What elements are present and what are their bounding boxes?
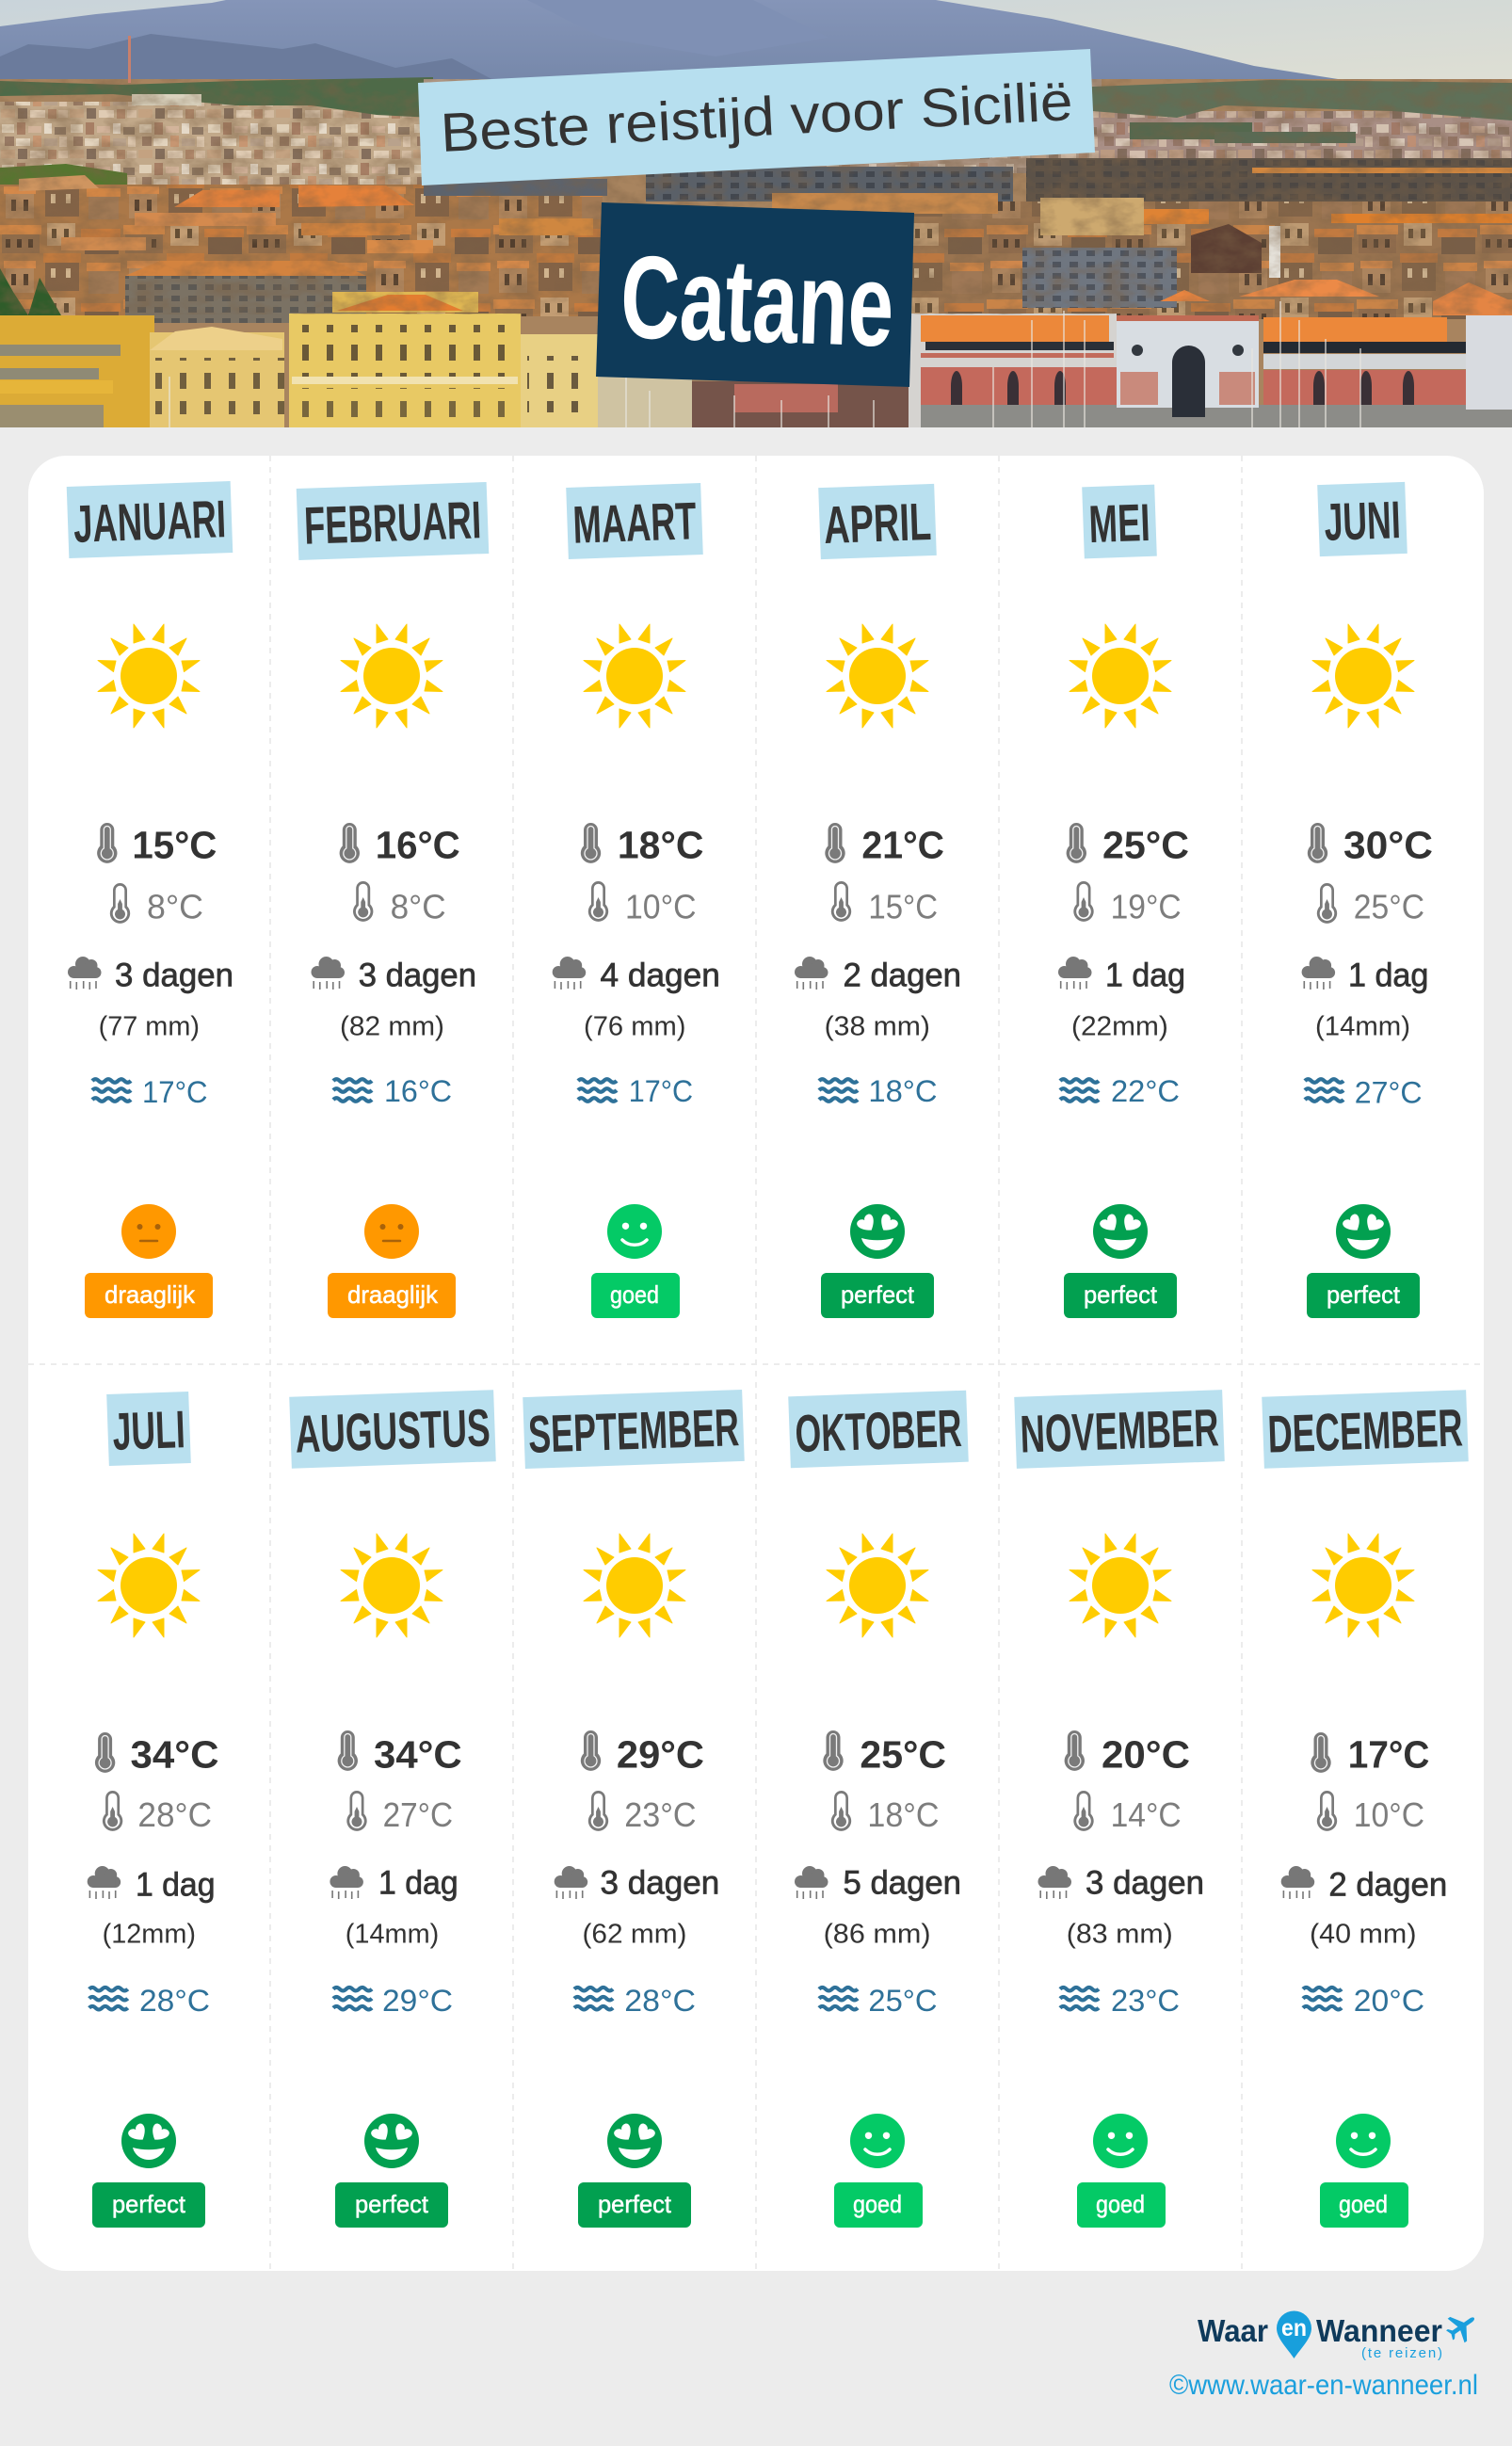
- icon: sun: [1070, 1534, 1171, 1637]
- icon: sun: [827, 624, 928, 728]
- maximum temperature: 15°C: [132, 824, 217, 867]
- rating: goed: [591, 1204, 680, 1318]
- maximum temperature: [1308, 823, 1433, 867]
- icon: sun: [98, 1534, 200, 1637]
- maximum temperature: 34°C: [130, 1733, 218, 1777]
- minimum temperature: 19°C: [1111, 888, 1182, 926]
- logo: Waar en Wanneer: en: [1281, 2315, 1307, 2341]
- sea temperature: [1060, 1984, 1180, 2018]
- sea temperature: 16°C: [384, 1074, 452, 1108]
- panel: december: [1262, 1390, 1469, 2228]
- rain days: [88, 1866, 215, 1904]
- rating: goed: goed: [1339, 2190, 1388, 2218]
- month label: juli: JULI: [111, 1399, 186, 1461]
- rainfall: (14mm): [1315, 1011, 1410, 1041]
- rainfall: (83 mm): [1067, 1919, 1173, 1949]
- minimum temperature: 10°C: [625, 888, 697, 926]
- rating: draaglijk: [328, 1204, 456, 1318]
- minimum temperature: [346, 1791, 453, 1834]
- sea temperature: [89, 1984, 210, 2018]
- minimum temperature: 8°C: [147, 888, 203, 926]
- minimum temperature: 23°C: [624, 1795, 697, 1834]
- panel: oktober: [788, 1391, 969, 2228]
- panel: januari: [67, 481, 233, 1318]
- minimum temperature: 8°C: [391, 888, 446, 926]
- sea temperature: [819, 1074, 938, 1108]
- rating: perfect: perfect: [112, 2190, 186, 2218]
- month label: maart: [566, 483, 703, 559]
- month label: mei: MEI: [1087, 492, 1151, 554]
- subtitle banner: Beste reistijd voor Sicilië: [439, 71, 1074, 164]
- rainfall: (14mm): [346, 1919, 439, 1949]
- month label: juni: [1317, 482, 1407, 556]
- rating: perfect: perfect: [1327, 1280, 1401, 1309]
- rating: perfect: perfect: [598, 2190, 672, 2218]
- sea temperature: [333, 1984, 453, 2018]
- rain days: [1281, 1866, 1447, 1904]
- month label: juni: JUNI: [1323, 490, 1402, 552]
- rain days: 1 dag: [1105, 957, 1185, 994]
- month label: november: NOVEMBER: [1020, 1397, 1220, 1464]
- rating: goed: goed: [1096, 2190, 1145, 2218]
- rating: perfect: [1064, 1204, 1177, 1318]
- minimum temperature: [1317, 1791, 1424, 1834]
- maximum temperature: [340, 823, 460, 867]
- minimum temperature: 14°C: [1111, 1795, 1182, 1834]
- rain days: [1058, 957, 1185, 994]
- panel: juni: [1302, 482, 1433, 1318]
- minimum temperature: [110, 883, 203, 926]
- sea temperature: 23°C: [1111, 1984, 1180, 2018]
- rainfall: (86 mm): [824, 1919, 931, 1949]
- month label: januari: JANUARI: [72, 489, 227, 554]
- rating: goed: [834, 2114, 923, 2228]
- rain days: 2 dagen: [1328, 1867, 1447, 1904]
- rating: perfect: [1307, 1204, 1420, 1318]
- logo: Waar en Wanneer: (te reizen): [1361, 2345, 1442, 2361]
- header photo: Catania city view: [0, 0, 1512, 427]
- month label: november: [1014, 1390, 1225, 1469]
- sea temperature: 29°C: [382, 1984, 453, 2018]
- rain days: 4 dagen: [601, 957, 720, 994]
- maximum temperature: [823, 1730, 946, 1777]
- month label: februari: [297, 482, 489, 560]
- icon: map pin: [1277, 2310, 1311, 2358]
- main card: [28, 456, 1484, 2271]
- month label: maart: MAART: [571, 491, 698, 555]
- minimum temperature: 18°C: [867, 1795, 940, 1834]
- sea temperature: [574, 1984, 696, 2018]
- month label: februari: FEBRUARI: [303, 490, 482, 555]
- month label: april: APRIL: [823, 491, 932, 555]
- minimum temperature: [103, 1791, 212, 1834]
- maximum temperature: [581, 1730, 704, 1777]
- month label: oktober: OKTOBER: [795, 1398, 963, 1463]
- sea temperature: 28°C: [139, 1984, 210, 2018]
- minimum temperature: [1317, 883, 1424, 926]
- rain days: 2 dagen: [844, 957, 961, 994]
- rating: draaglijk: draaglijk: [347, 1280, 439, 1309]
- icon: sun: [1312, 1534, 1414, 1637]
- maximum temperature: 30°C: [1343, 824, 1433, 867]
- minimum temperature: [353, 881, 446, 926]
- rainfall: (12mm): [103, 1919, 196, 1949]
- panel: april: [795, 484, 961, 1318]
- minimum temperature: [1073, 881, 1182, 926]
- minimum temperature: 10°C: [1354, 1795, 1424, 1834]
- maximum temperature: [1067, 823, 1189, 867]
- rain days: 3 dagen: [115, 957, 233, 994]
- logo: Waar en Wanneer: Waar: [1198, 2313, 1268, 2348]
- icon: sun: [98, 624, 200, 728]
- rainfall: (77 mm): [99, 1011, 200, 1041]
- website url: ©www.waar-en-wanneer.nl: [1169, 2370, 1478, 2401]
- maximum temperature: [338, 1730, 462, 1777]
- sea temperature: 25°C: [868, 1984, 938, 2018]
- rating: goed: goed: [610, 1280, 659, 1309]
- month label: april: [818, 484, 937, 559]
- icon: sun: [341, 1534, 442, 1637]
- month label: augustus: [289, 1390, 496, 1469]
- maximum temperature: 25°C: [860, 1733, 946, 1777]
- subtitle banner: [418, 49, 1095, 185]
- icon: sun: [341, 624, 442, 728]
- rainfall: (62 mm): [582, 1919, 687, 1949]
- maximum temperature: 34°C: [374, 1733, 462, 1777]
- icon: sun: [584, 1534, 685, 1637]
- panel: mei: [1058, 485, 1189, 1318]
- sea temperature: 17°C: [629, 1074, 693, 1108]
- maximum temperature: 29°C: [617, 1733, 704, 1777]
- icon: sun: [1070, 624, 1171, 728]
- logo: Waar en Wanneer: [1198, 2306, 1483, 2361]
- rating: goed: [1077, 2114, 1166, 2228]
- title banner: [596, 202, 914, 387]
- minimum temperature: [588, 1791, 697, 1834]
- maximum temperature: 16°C: [376, 824, 460, 867]
- sea temperature: [578, 1074, 693, 1108]
- month label: augustus: AUGUSTUS: [295, 1397, 491, 1464]
- sea temperature: 27°C: [1355, 1076, 1422, 1110]
- maximum temperature: 25°C: [1102, 824, 1189, 867]
- minimum temperature: 28°C: [137, 1795, 212, 1834]
- panel: november: [1014, 1390, 1225, 2228]
- rating: perfect: [335, 2114, 448, 2228]
- sea temperature: 18°C: [868, 1074, 938, 1108]
- month label: mei: [1082, 485, 1157, 558]
- maximum temperature: [581, 823, 703, 867]
- rating: perfect: perfect: [841, 1280, 915, 1309]
- rain days: 1 dag: [378, 1865, 458, 1902]
- title banner: Catane: [619, 232, 896, 372]
- sea temperature: [819, 1984, 938, 2018]
- rain days: 3 dagen: [359, 957, 476, 994]
- rain days: 5 dagen: [844, 1865, 961, 1902]
- month label: september: SEPTEMBER: [527, 1397, 740, 1464]
- maximum temperature: [95, 1732, 219, 1777]
- rating: goed: goed: [853, 2190, 902, 2218]
- rain days: [553, 957, 720, 994]
- panel: maart: [553, 483, 720, 1318]
- sea temperature: [333, 1074, 452, 1108]
- rain days: [1302, 957, 1428, 994]
- rain days: 3 dagen: [1086, 1865, 1204, 1902]
- sea temperature: 22°C: [1111, 1074, 1180, 1108]
- month label: juli: [106, 1392, 191, 1466]
- icon: sun: [1312, 624, 1414, 728]
- month label: januari: [67, 481, 233, 558]
- panel: februari: [297, 482, 489, 1318]
- minimum temperature: 27°C: [383, 1795, 453, 1834]
- rain days: [795, 957, 961, 994]
- minimum temperature: [831, 1791, 940, 1834]
- icon: sun: [584, 624, 685, 728]
- icon: sun: [827, 1534, 928, 1637]
- rain days: [330, 1865, 458, 1902]
- panel: juli: [88, 1392, 218, 2228]
- rain days: [311, 957, 476, 994]
- sea temperature: [1305, 1076, 1422, 1110]
- rating: perfect: perfect: [1084, 1280, 1158, 1309]
- rating: perfect: [92, 2114, 205, 2228]
- month label: september: [523, 1390, 745, 1469]
- panel: september: [523, 1390, 745, 2228]
- maximum temperature: 20°C: [1102, 1733, 1190, 1777]
- sea temperature: [92, 1075, 207, 1109]
- month label: oktober: [788, 1391, 969, 1468]
- maximum temperature: 18°C: [618, 824, 703, 867]
- rating: draaglijk: [85, 1204, 213, 1318]
- sea temperature: 20°C: [1354, 1984, 1424, 2018]
- rainfall: (38 mm): [825, 1011, 930, 1041]
- logo: Waar en Wanneer: Wanneer: [1316, 2313, 1442, 2348]
- rain days: 1 dag: [136, 1867, 215, 1904]
- minimum temperature: 15°C: [868, 888, 938, 926]
- rain days: 1 dag: [1348, 957, 1428, 994]
- rating: perfect: [578, 2114, 691, 2228]
- sea temperature: [1060, 1074, 1180, 1108]
- rating: perfect: [821, 1204, 934, 1318]
- panel: augustus: [289, 1390, 496, 2228]
- maximum temperature: 21°C: [861, 824, 944, 867]
- rating: goed: [1320, 2114, 1408, 2228]
- maximum temperature: [1065, 1730, 1190, 1777]
- sea temperature: 17°C: [142, 1075, 207, 1109]
- rain days: 3 dagen: [601, 1865, 719, 1902]
- icon: airplane: [1441, 2306, 1483, 2347]
- rating: perfect: perfect: [355, 2190, 429, 2218]
- sea temperature: [1303, 1984, 1424, 2018]
- minimum temperature: 25°C: [1354, 888, 1424, 926]
- minimum temperature: [588, 881, 697, 926]
- rainfall: (22mm): [1071, 1011, 1168, 1041]
- rating: draaglijk: draaglijk: [105, 1280, 196, 1309]
- maximum temperature: 17°C: [1348, 1733, 1429, 1777]
- sea temperature: 28°C: [624, 1984, 696, 2018]
- maximum temperature: [97, 823, 217, 867]
- minimum temperature: [1073, 1791, 1182, 1834]
- rainfall: (76 mm): [584, 1011, 685, 1041]
- maximum temperature: [825, 823, 944, 867]
- rainfall: (82 mm): [340, 1011, 444, 1041]
- rainfall: (40 mm): [1310, 1919, 1416, 1949]
- minimum temperature: [831, 881, 938, 926]
- maximum temperature: [1311, 1732, 1429, 1777]
